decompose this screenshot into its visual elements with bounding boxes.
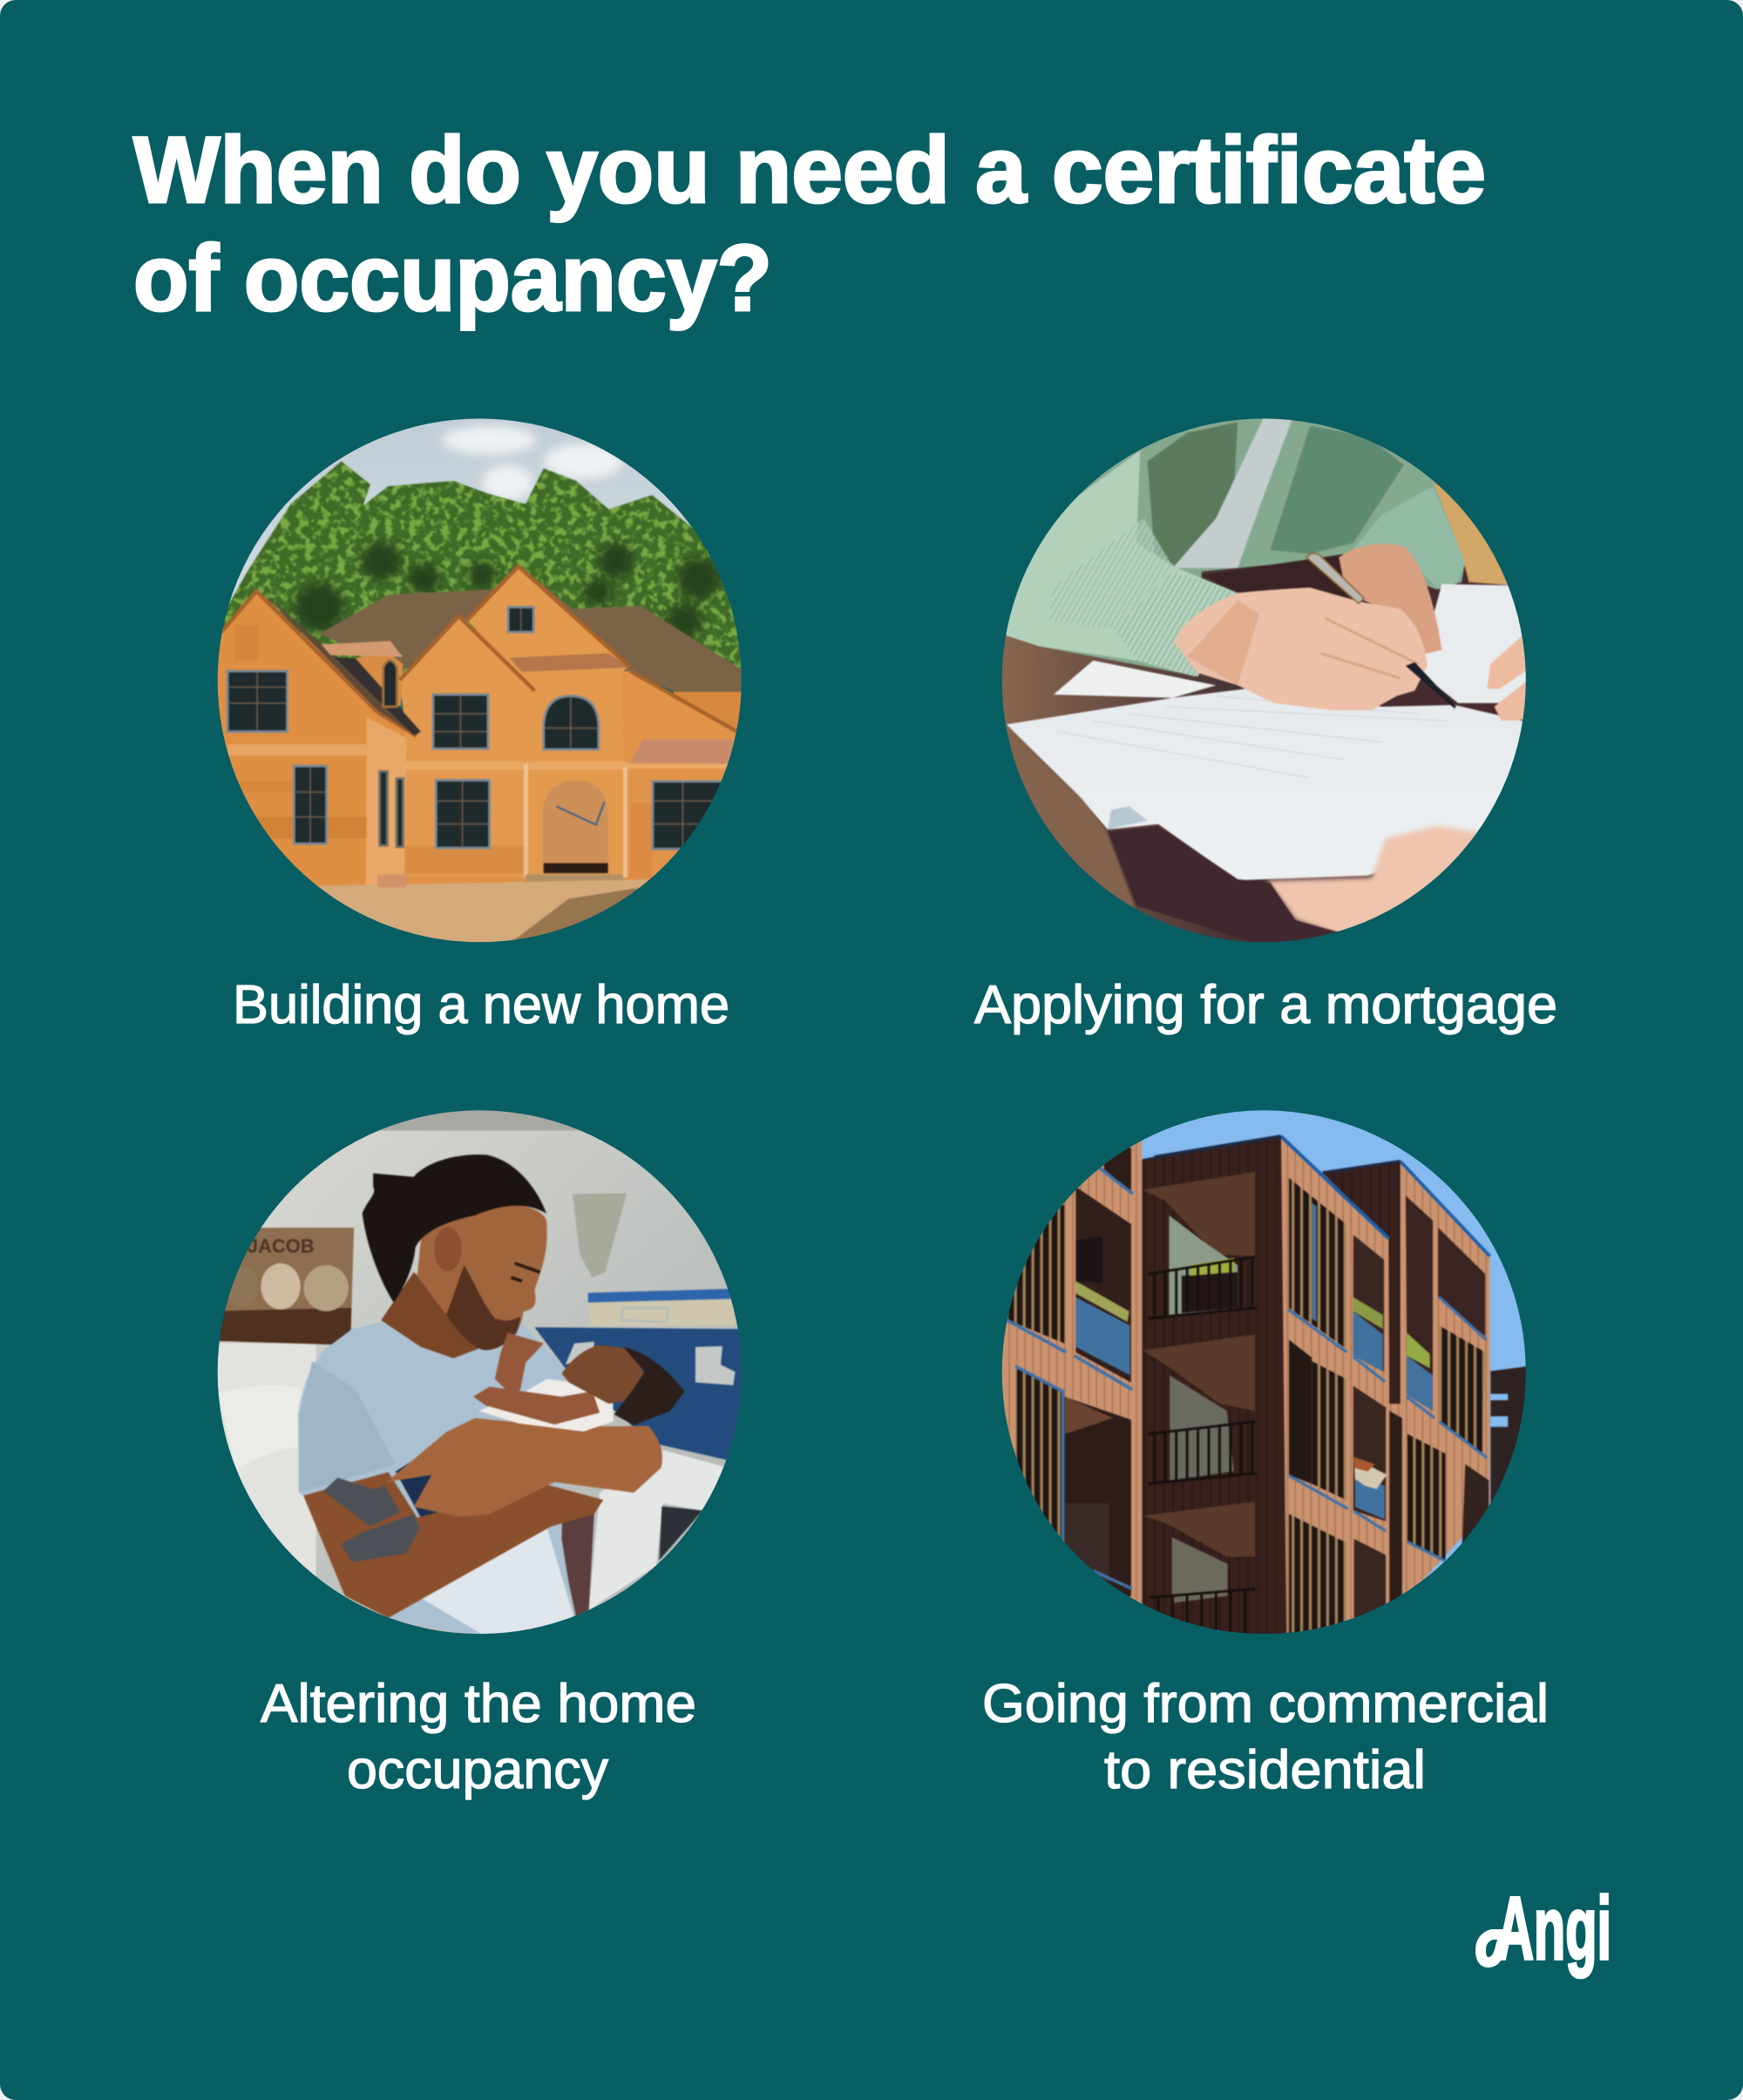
caption: applying for a mortgage: Applying for a mortgage: [974, 975, 1557, 1035]
blue window sills: [1288, 1297, 1487, 1561]
arched doorway: [526, 781, 623, 885]
photo: hands signing mortgage paperwork: [1002, 418, 1526, 943]
baby socks: [323, 1478, 420, 1562]
writing hand: [1175, 587, 1428, 710]
sky: [985, 1098, 1551, 1656]
main document: [1007, 689, 1530, 880]
dark table behind hands: [1202, 554, 1346, 600]
rear papers: [1054, 584, 1530, 703]
caption: going from commercial to residential: [982, 1674, 1549, 1800]
dirt ground: [291, 875, 670, 956]
left wood face: [995, 1141, 1155, 1638]
caption: altering the home occupancy: [261, 1674, 696, 1800]
baby pants: [396, 1440, 546, 1522]
sky: [228, 418, 694, 606]
logo: Angi: [1481, 1879, 1611, 1978]
far hand: [1339, 544, 1441, 654]
window muntins: [229, 608, 724, 848]
main corner wood face: [1281, 1136, 1388, 1638]
baby head: [562, 1345, 645, 1404]
caption: altering the home occupancy: occupancy: [347, 1740, 608, 1800]
title: When do you need a certificate: [133, 117, 1486, 222]
neck: [381, 1272, 478, 1358]
distant building: [1490, 1366, 1527, 1525]
rear block: [1323, 1162, 1490, 1624]
right face windows and louvres: [1289, 1178, 1402, 1638]
pen: [1306, 553, 1456, 708]
white dresser: [556, 1450, 728, 1617]
ear: [434, 1227, 462, 1271]
table shadow foreground: [1108, 826, 1339, 937]
trees: [215, 461, 746, 686]
caption: going from commercial to residential: to residential: [1104, 1740, 1426, 1800]
photo: new home under construction: [218, 418, 742, 943]
yellow background corner: [1433, 481, 1508, 586]
father's upper arm and hand: [386, 1418, 662, 1517]
roof trim: [221, 566, 737, 735]
central dark bays: [1142, 1136, 1286, 1638]
walls: [211, 566, 746, 888]
baby hair: [614, 1347, 684, 1426]
shirt: [1006, 418, 1466, 678]
title: [133, 117, 1486, 330]
left blue sills: [1007, 1168, 1133, 1589]
caption: going from commercial to residential: Going from commercial: [982, 1674, 1549, 1734]
copper flashing and awnings: [322, 641, 735, 763]
roof: [320, 565, 742, 692]
windows: [227, 607, 725, 849]
undershirt: [1173, 411, 1293, 568]
title: of occupancy?: [133, 225, 772, 330]
logo: Angi: Angi: [1496, 1879, 1611, 1978]
balcony railings: [1148, 1257, 1257, 1638]
caption: altering the home occupancy: Altering the home: [261, 1674, 696, 1734]
table: [1002, 482, 1523, 942]
planter flowers: [1354, 1457, 1387, 1489]
photo: father holding baby: [218, 1110, 742, 1635]
room wall: [218, 1110, 738, 1633]
face: [417, 1204, 547, 1350]
right fingers: [1487, 635, 1526, 721]
baby onesie: [478, 1379, 613, 1432]
caption: building a new home: Building a new home: [233, 975, 729, 1035]
father's lower arm: [303, 1472, 603, 1618]
blurred front hand: [1266, 826, 1495, 938]
baby arms: [473, 1332, 600, 1425]
photo: wood-clad apartment building: [985, 1098, 1551, 1656]
t-shirt: [298, 1322, 574, 1638]
framed picture: JACOB: [248, 1236, 315, 1257]
hair: [363, 1155, 546, 1303]
framed picture: [211, 1228, 354, 1345]
wall sconce: [573, 1193, 627, 1277]
suitcases: [534, 1289, 746, 1464]
